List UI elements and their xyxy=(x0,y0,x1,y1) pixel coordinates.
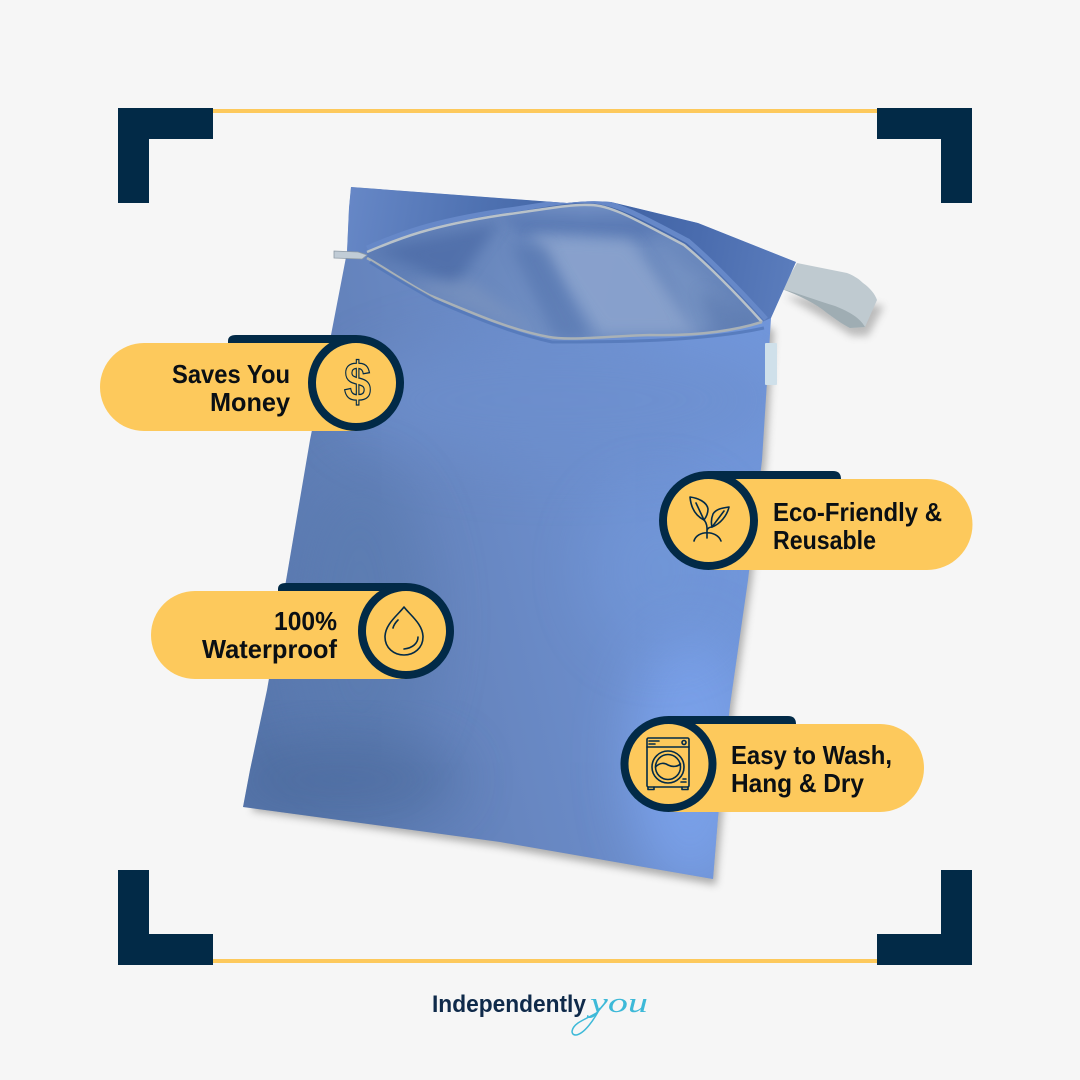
ring xyxy=(312,339,400,427)
script word: you xyxy=(586,987,648,1019)
icon: dollar: $ xyxy=(344,350,371,413)
icon: washing machine xyxy=(647,738,689,790)
label: Eco-Friendly & xyxy=(773,497,942,527)
label: 100% xyxy=(274,606,337,636)
elastic handle xyxy=(782,263,884,336)
sewn label tag xyxy=(765,343,777,385)
icon: water drop xyxy=(385,607,423,655)
tab xyxy=(708,471,841,481)
wordmark: Independently xyxy=(432,991,587,1018)
ring xyxy=(624,720,712,808)
label: Easy to Wash, xyxy=(731,740,892,770)
product photo: blue wet bag with zipper and handle xyxy=(220,187,884,890)
pill xyxy=(668,724,924,812)
label: Hang & Dry xyxy=(731,768,865,798)
logo: Independently you xyxy=(432,987,648,1035)
zipper tape xyxy=(367,205,762,322)
flap above zipper xyxy=(347,187,796,322)
label: Saves You xyxy=(172,359,290,389)
bag body xyxy=(243,187,796,879)
callout: Saves You Money xyxy=(100,335,400,431)
pill xyxy=(151,591,406,679)
pill xyxy=(100,343,356,431)
ring xyxy=(362,587,450,675)
inside lining of open zipper xyxy=(367,206,760,338)
label: Reusable xyxy=(773,525,876,555)
zipper tape above teeth xyxy=(367,201,766,319)
fabric shading xyxy=(220,187,796,890)
ring xyxy=(663,475,754,566)
icon: sprout xyxy=(690,497,729,541)
frame: corner brackets and gold lines xyxy=(118,108,972,965)
tab xyxy=(228,335,356,345)
callout: Eco-Friendly and Reusable xyxy=(663,471,972,570)
y tail xyxy=(572,1008,600,1035)
pill xyxy=(708,479,972,570)
label: Money xyxy=(210,387,291,417)
callout: Easy to Wash, Hang and Dry xyxy=(624,716,924,812)
bag drop shadow xyxy=(252,300,774,885)
tab xyxy=(278,583,406,593)
callout: 100% Waterproof xyxy=(151,583,450,679)
zipper pull xyxy=(334,251,367,259)
tab xyxy=(668,716,796,726)
label: Waterproof xyxy=(202,634,337,664)
